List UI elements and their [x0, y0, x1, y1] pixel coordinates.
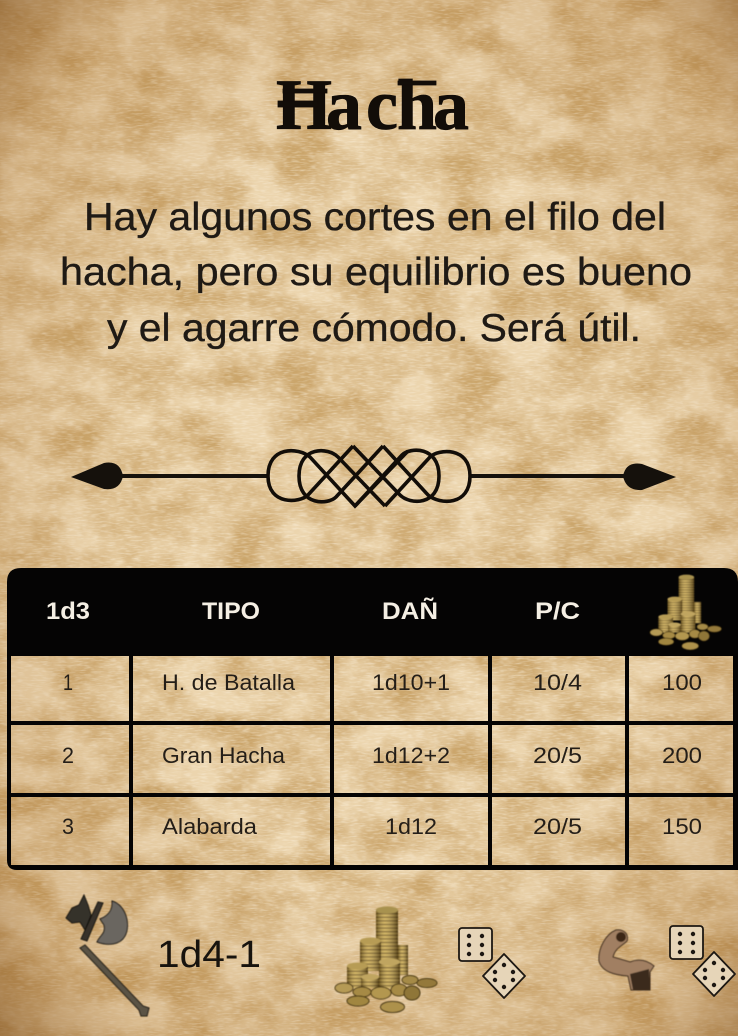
row 3: 150 — [662, 814, 702, 839]
description text: Hay algunos cortes en el filo del — [84, 196, 666, 239]
icon: flexed arm — [599, 930, 654, 990]
icon: coins in header — [650, 575, 721, 650]
icon: battle axe — [66, 895, 149, 1016]
row 2: 1d12+2 — [372, 743, 450, 768]
icon: two dice, second set — [670, 926, 735, 996]
row 1: H. de Batalla — [162, 670, 296, 695]
ornamental divider with knot and arrowheads — [71, 446, 676, 506]
row 3: 1d12 — [385, 814, 437, 839]
right arrow — [470, 464, 676, 490]
table header labels: DAÑ — [382, 597, 438, 625]
table header labels: P/C — [535, 598, 580, 625]
row 3: 20/5 — [533, 814, 582, 839]
row 3 — [62, 814, 702, 839]
row 3: 3 — [62, 814, 74, 839]
table header labels: TIPO — [202, 598, 260, 625]
row 2: 20/5 — [533, 743, 582, 768]
row 1: 100 — [662, 670, 702, 695]
row 2 — [62, 743, 702, 768]
description text — [60, 196, 692, 350]
icon: coin pile — [335, 906, 437, 1012]
table header labels — [46, 597, 580, 625]
damage value: 1d4-1 — [157, 934, 261, 976]
icon: two dice — [459, 928, 525, 998]
row 2: 2 — [62, 743, 74, 768]
left arrow — [71, 463, 267, 489]
table header labels: 1d3 — [46, 598, 90, 625]
description text: hacha, pero su equilibrio es bueno — [60, 251, 692, 294]
title: Hacha — [276, 65, 469, 145]
row 3: Alabarda — [162, 814, 258, 839]
row 1: 1 — [63, 670, 73, 695]
row 1: 10/4 — [533, 670, 582, 695]
row 1: 1d10+1 — [372, 670, 450, 695]
celtic knot — [268, 446, 470, 506]
row 1 — [63, 670, 702, 695]
row 2: Gran Hacha — [162, 743, 286, 768]
table — [7, 568, 738, 870]
description text: y el agarre cómodo. Será útil. — [107, 307, 641, 350]
row 2: 200 — [662, 743, 702, 768]
table frame with header band — [7, 568, 738, 870]
